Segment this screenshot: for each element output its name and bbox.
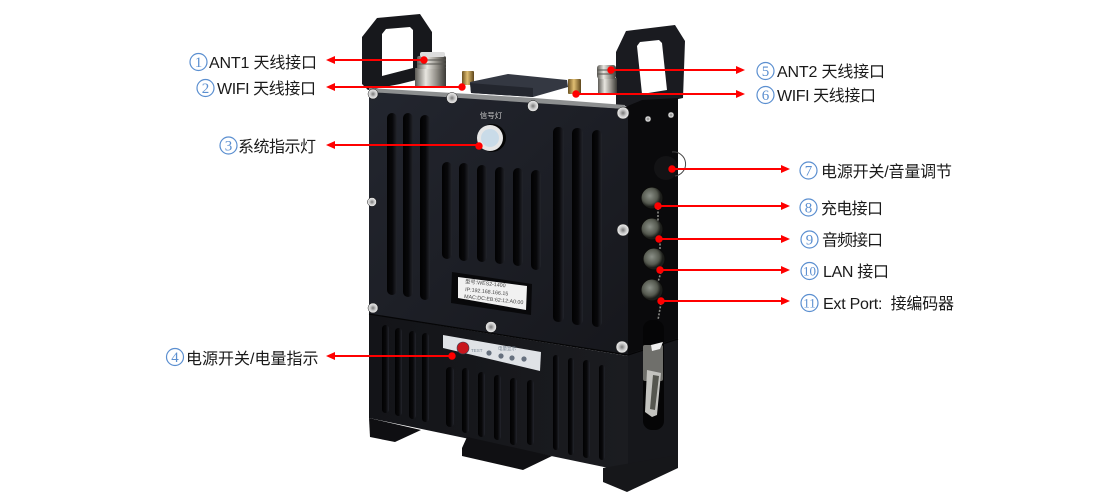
callout 6: WIFI: WIFI 天线接口 <box>777 87 876 105</box>
port connectors <box>641 187 665 301</box>
callout 5: ANT2: ANT2 天线接口 <box>777 63 885 81</box>
model label: IP:192.168.166.15 <box>465 287 509 298</box>
vents: lower centre <box>446 367 534 445</box>
callout 2: WIFI: WIFI 天线接口 <box>217 80 316 98</box>
model label <box>451 272 532 315</box>
device photo <box>362 14 686 492</box>
callout 3: system light <box>220 137 483 156</box>
antenna connector: WIFI left <box>462 71 474 85</box>
vents: upper centre <box>442 162 541 270</box>
callout 5: ANT2 <box>607 62 885 81</box>
vents: upper right <box>553 127 602 327</box>
callout 6: WIFI: 6 <box>762 88 770 104</box>
model label: 型号:WES2-1400 <box>465 277 506 289</box>
antenna connector: ANT1 <box>415 52 446 88</box>
callout 11: Ext Port: Ext Port: 接编码器 <box>823 295 954 313</box>
connector chains <box>658 208 661 320</box>
callout 9: audio: 音频接口 <box>822 232 883 250</box>
antenna connector: ANT2 <box>597 65 617 94</box>
side panel <box>623 98 678 360</box>
callout 4: power switch <box>166 348 456 368</box>
handle: right <box>616 25 685 107</box>
callout 10: LAN <box>656 262 889 281</box>
screws <box>368 89 674 353</box>
callout 8: charging: 8 <box>805 200 812 216</box>
signal light <box>477 124 506 152</box>
knob <box>654 152 686 180</box>
latch <box>643 342 663 417</box>
front panel upper <box>369 91 628 356</box>
foot: middle <box>462 437 552 470</box>
antenna connector: WIFI right <box>568 79 581 94</box>
callout 7: power and volume <box>668 162 952 181</box>
foot: right <box>603 455 678 492</box>
top cover front edge <box>470 83 533 97</box>
callout 4: power switch: 电源开关/电量指示 <box>186 350 318 368</box>
power and battery panel <box>443 335 541 371</box>
callout 10: LAN: 10 <box>803 264 816 278</box>
top cover <box>470 74 568 97</box>
callout 4: power switch: 4 <box>171 350 179 366</box>
callout 10: LAN: LAN 接口 <box>823 263 889 281</box>
power and battery panel: 电量显示 <box>498 345 516 352</box>
callout 7: power and volume: 7 <box>805 164 813 180</box>
callout 8: charging <box>654 199 883 218</box>
lower side panel <box>628 338 678 472</box>
callout 11: Ext Port: 11 <box>803 296 816 310</box>
seam <box>369 314 678 355</box>
foot: left <box>369 418 421 442</box>
callout 3: system light: 3 <box>225 138 232 154</box>
callout 5: ANT2: 5 <box>762 64 769 80</box>
callout 3: system light: 系统指示灯 <box>238 138 316 156</box>
callout 2: WIFI: 2 <box>202 81 209 97</box>
handle: left <box>362 14 432 90</box>
callout 11: Ext Port <box>657 294 954 313</box>
latch recess <box>643 320 664 430</box>
vents: lower left <box>382 325 429 422</box>
vents: upper left <box>387 113 430 300</box>
callout 8: charging: 充电接口 <box>821 200 883 218</box>
callout 6: WIFI <box>572 86 876 105</box>
callout 1: ANT1: ANT1 天线接口 <box>209 54 317 72</box>
callout 9: audio <box>655 231 883 250</box>
power and battery panel: TEST <box>471 348 483 353</box>
front panel lower <box>369 314 628 472</box>
callout 1: ANT1: 1 <box>195 55 202 71</box>
callout 2: WIFI <box>197 80 466 98</box>
model label: MAC:DC:EB:62:12:A0:00 <box>464 294 524 306</box>
callout 7: power and volume: 电源开关/音量调节 <box>821 163 952 181</box>
signal light label: 信号灯 <box>480 110 503 120</box>
vents: lower right <box>553 355 605 460</box>
callout 1: ANT1 <box>190 54 428 72</box>
callout 9: audio: 9 <box>806 232 813 248</box>
top metal rail <box>369 88 625 109</box>
